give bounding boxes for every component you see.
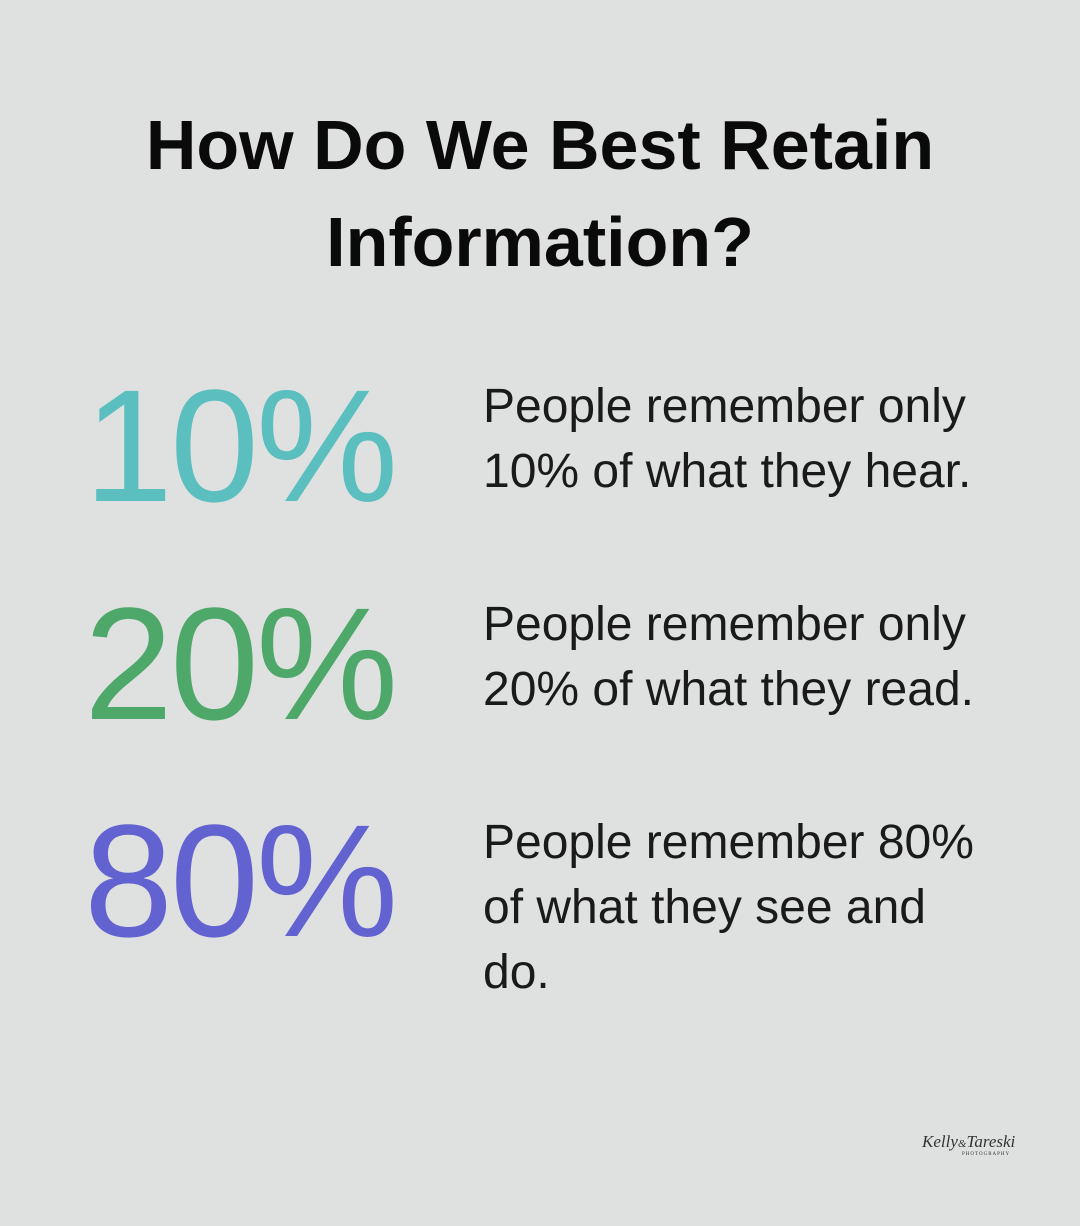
stat 20% text: People remember only (483, 598, 966, 651)
stat 80% number: 80% (84, 791, 395, 970)
stat 20% text (483, 598, 974, 716)
stat 80% text: of what they see and (483, 881, 926, 934)
title: How Do We Best Retain (146, 106, 934, 184)
logo signature: Kelly&Tareski (922, 1132, 1015, 1151)
stat 10% text: People remember only (483, 380, 966, 433)
stat 20% text: 20% of what they read. (483, 663, 974, 716)
logo signature: PHOTOGRAPHY (962, 1152, 1010, 1157)
stat 20% number: 20% (84, 574, 395, 753)
stat 10% text: 10% of what they hear. (483, 445, 971, 498)
stat 80% text (483, 816, 974, 999)
title (146, 106, 934, 281)
stat 10% text (483, 380, 971, 498)
stat 80% text: People remember 80% (483, 816, 974, 869)
stat 80% text: do. (483, 946, 550, 999)
title: Information? (326, 203, 754, 281)
stat 10% number: 10% (84, 356, 395, 535)
